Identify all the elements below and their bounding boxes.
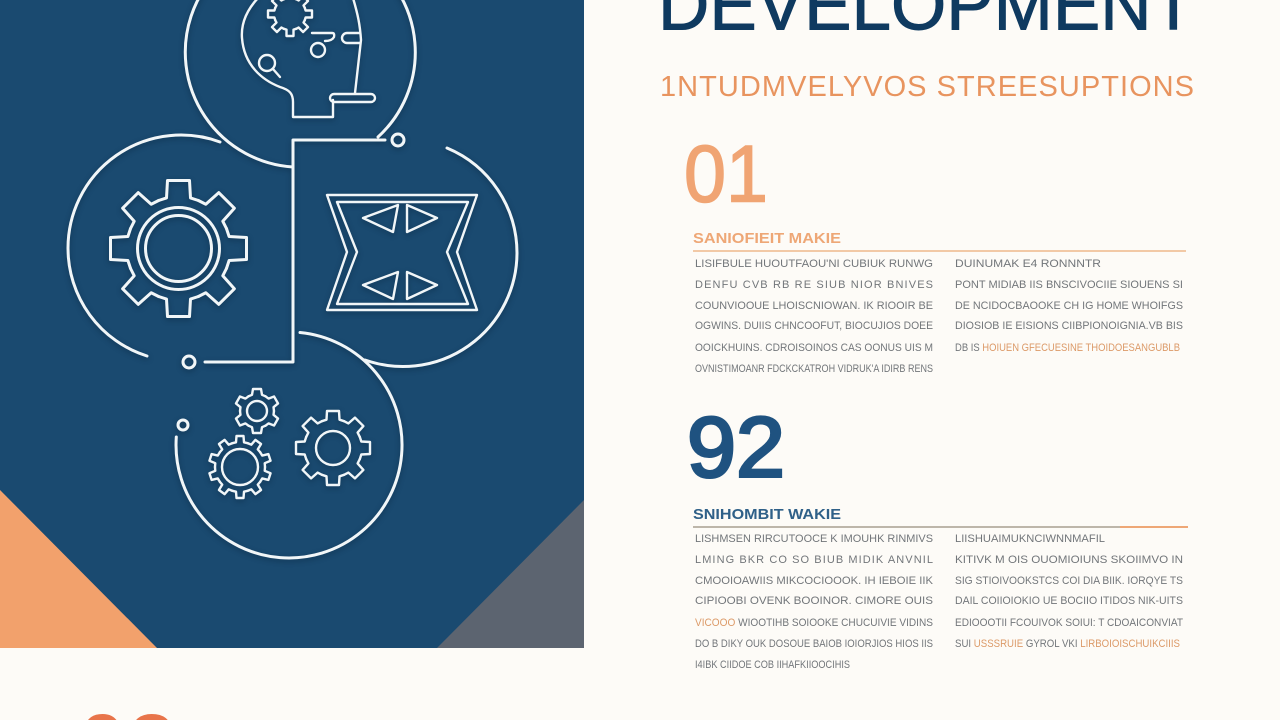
right circle outline — [365, 148, 517, 367]
section 1 right text column: DE NCIDOCBAOOKE CH IG HOME WHOIFGS — [955, 300, 1183, 312]
section 2 rule — [693, 526, 1188, 528]
line art network — [68, 0, 517, 558]
section 1 left text column — [695, 258, 933, 375]
section 1 left text column: DENFU CVB RB RE SIUB NIOR BNIVES — [695, 279, 933, 291]
section 1 left text column: OOICKHUINS. CDROISOINOS CAS OONUS UIS M — [695, 342, 933, 354]
section 2 left text column: LMING BKR CO SO BIUB MIDIK ANVNIL — [695, 554, 933, 566]
section 2 left text column: DO B DIKY OUK DOSOUE BAIOB IOIORJIOS HIOS IIS — [695, 638, 933, 650]
section 2 left text column: I4IBK CIIDOE COB IIHAFKIIOOCIHIS — [695, 659, 850, 671]
section 1 left text column: LISIFBULE HUOUTFAOU'NI CUBIUK RUNWG — [695, 258, 933, 270]
icon: head with ideas — [242, 0, 375, 117]
icon: large gear — [110, 180, 247, 316]
section 2 right text column: SIG STIOIVOOKSTCS COI DIA BIIK. IORQYE TS — [955, 575, 1183, 587]
section 1 right text column: PONT MIDIAB IIS BNSCIVOCIIE SIOUENS SI — [955, 279, 1183, 291]
left circle outline — [68, 135, 220, 356]
subtitle: 1NTUDMVELYVOS STREESUPTIONS — [660, 71, 1194, 103]
section 1 right text column — [955, 258, 1183, 354]
top circle outline — [185, 0, 415, 167]
section 2 right text column: EDIOOOTII FCOUIVOK SOIUI: T CDOAICONVIAT — [955, 617, 1183, 629]
section 2 left text column: LISHMSEN RIRCUTOOCE K IMOUHK RINMIVS — [695, 533, 933, 545]
section 1 right text column: DUINUMAK E4 RONNNTR — [955, 258, 1101, 270]
section 2 left text column: VICOOO WIOOTIHB SOIOOKE CHUCUIVIE VIDINS — [695, 617, 933, 629]
section 2 number: 92 — [687, 400, 785, 496]
section 2 heading: SNIHOMBIT WAKIE — [693, 506, 841, 523]
section 1 right text column: DB IS HOIUEN GFECUESINE THOIDOESANGUBLB — [955, 342, 1180, 354]
section 1 left text column: OVNISTIMOANR FDCKCKATROH VIDRUK'A IDIRB RENS — [695, 363, 933, 375]
icon: hourglass frame with arrows — [327, 195, 477, 310]
section 1 number: 01 — [684, 130, 768, 220]
connector node: bottom — [178, 420, 188, 430]
icon: small top gear — [234, 389, 280, 433]
section 2 right text column: SUI USSSRUIE GYROL VKI LIRBOIOISCHUIKCIIIS — [955, 638, 1180, 650]
section 2 right text column — [955, 533, 1183, 650]
section 1 left text column: COUNVIOOUE LHOISCNIOWAN. IK RIOOIR BE — [695, 300, 933, 312]
orange corner triangle — [0, 490, 157, 648]
connector lines — [205, 140, 385, 362]
connector node: left — [183, 356, 195, 368]
section 1 heading: SANIOFIEIT MAKIE — [693, 230, 841, 247]
section 1 rule — [693, 250, 1186, 252]
section 2 left text column: CIPIOOBI OVENK BOOINOR. CIMORE OUIS — [695, 595, 933, 607]
section 2 left text column — [695, 533, 934, 671]
section 2 left text column: CMOOIOAWIIS MIKCOCIOOOK. IH IEBOIE IIK — [695, 575, 934, 587]
section 1 left text column: OGWINS. DUIIS CHNCOOFUT, BIOCUJIOS DOEE — [695, 320, 933, 332]
section 1 right text column: DIOSIOB IE EISIONS CIIBPIONOIGNIA.VB BIS — [955, 320, 1183, 332]
icon: lower left gear — [208, 436, 272, 498]
section 2 right text column: DAIL COIIOIOKIO UE BOCIIO ITIDOS NIK-UITS — [955, 595, 1183, 607]
section 2 right text column: KITIVK M OIS OUOMIOIUNS SKOIIMVO IN — [955, 554, 1183, 566]
grey corner triangle — [437, 500, 584, 648]
icon: lower right gear — [296, 411, 370, 485]
bottom circle outline — [176, 332, 402, 558]
section 2 right text column: LIISHUAIMUKNCIWNNMAFIL — [955, 533, 1105, 545]
connector node: top — [392, 134, 404, 146]
panel: illustration — [0, 0, 584, 648]
